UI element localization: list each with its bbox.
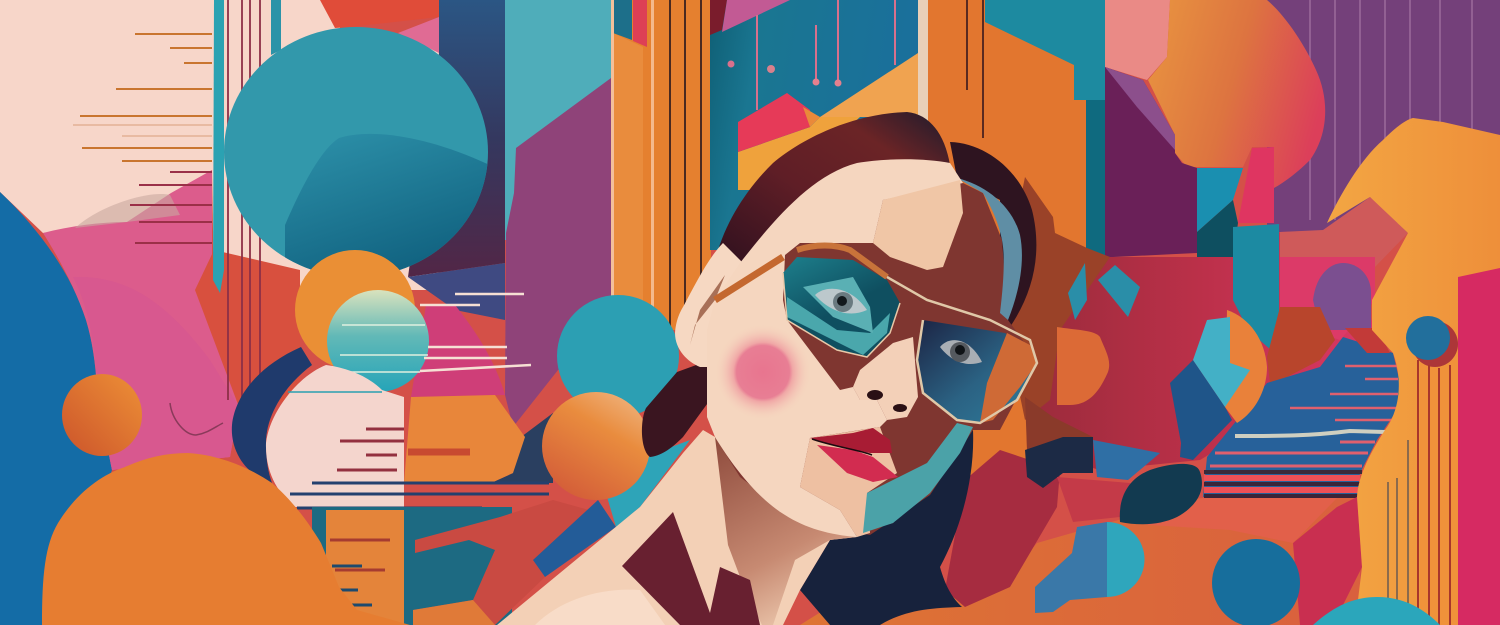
shape: salmon ground patch	[1130, 498, 1337, 543]
decoration: dashes over pale sphere	[288, 392, 549, 508]
glasses: right lens orange reflection	[980, 333, 1037, 423]
shape: blue brush block	[1093, 440, 1160, 480]
shape: rust blob	[1267, 307, 1335, 383]
hair: right strand	[950, 142, 1036, 327]
face: forehead peach shade	[873, 180, 963, 270]
face: chin peach shade	[800, 427, 897, 537]
panel: purple column	[505, 78, 611, 427]
shape: pale pink half sphere	[266, 365, 404, 507]
panel: teal column	[505, 0, 611, 240]
shape: hair shadow behind head	[1000, 177, 1110, 420]
decoration: white dashes	[420, 294, 531, 371]
ear: inner shade	[690, 275, 725, 345]
decoration: grey drips right	[1388, 440, 1408, 625]
icon: small orange sphere left	[62, 374, 142, 456]
icon: teal half circle with brushed blue	[1035, 522, 1144, 613]
face: teal jaw strip	[863, 423, 973, 533]
panel: teal top right block	[985, 0, 1105, 260]
shape: yellow orange mass right	[1327, 118, 1500, 625]
shape: orange brush block	[404, 395, 525, 483]
cheek: blush	[715, 324, 811, 420]
face: blue-grey side band	[957, 178, 1022, 320]
glasses: right lens	[917, 320, 1037, 423]
panel: large orange block	[928, 0, 1086, 480]
shape: mid blue brush patch	[1170, 360, 1232, 460]
shape: pink haze block	[1105, 0, 1170, 80]
shape: navy crescent	[232, 347, 312, 483]
shape: grey mist	[75, 194, 180, 228]
shape: lower maroon mass	[945, 450, 1060, 607]
icon: orange sphere centre left	[295, 250, 415, 370]
shape: dark patch between spheres	[491, 413, 553, 483]
decoration: drips on orange block	[967, 0, 983, 138]
decoration: thin vertical bars	[213, 0, 281, 400]
shape: rust curve above stripes	[1345, 328, 1390, 353]
shape: orange crescent	[1225, 310, 1267, 423]
glasses: frame	[715, 246, 1037, 423]
shape: pink half disc	[411, 305, 505, 397]
shape: left pink hills	[43, 170, 300, 470]
shape: dark teal strip	[1086, 100, 1105, 258]
panel: dark teal arch	[710, 0, 920, 250]
hair: lower dark navy	[800, 430, 973, 625]
shape: red patch	[1057, 477, 1137, 522]
shape: orange stripe band	[1420, 360, 1458, 625]
nose: light bridge	[853, 337, 918, 420]
panel: purple striped background	[1267, 0, 1500, 232]
shape: blue diagonal brush	[533, 500, 616, 577]
shape: dark navy blob	[1025, 437, 1093, 488]
glasses: left lens	[783, 257, 900, 357]
eye: left	[803, 277, 873, 333]
shape: light teal brush patch	[1193, 317, 1250, 407]
icon: orange ball centre	[542, 392, 650, 500]
panel: navy column	[408, 0, 505, 277]
icon: large orange sphere lower left	[42, 453, 410, 625]
panel: lower collage block	[312, 500, 589, 625]
nose: nostrils	[867, 390, 907, 412]
shape: teal lower disc	[605, 440, 690, 527]
shape: orange red blob	[1148, 0, 1325, 188]
face: dark skin shadow	[715, 163, 1037, 535]
shape: crimson band	[1280, 257, 1375, 340]
torso: neck under-jaw shade	[715, 437, 857, 625]
icon: blue sphere lower right	[1212, 539, 1300, 625]
shape: dark wedge below glasses	[1025, 397, 1093, 450]
decoration: pale strip beside arch	[918, 0, 928, 125]
torso: dark chest wedge	[622, 512, 760, 625]
shape: teal and dark teal blocks	[1197, 168, 1243, 257]
glasses: left lens light reflection	[787, 297, 890, 355]
icon: large teal sphere	[224, 27, 488, 270]
decoration: horizontal dashes upper left	[73, 34, 212, 243]
figure: woman portrait	[497, 112, 1037, 625]
shape: orange paint patch	[1057, 327, 1109, 405]
shape: teal block with point	[1233, 224, 1279, 357]
lips: red mouth	[810, 428, 898, 482]
shape: left blue arc	[0, 192, 112, 625]
shape: pink top strip	[398, 17, 439, 53]
eye: right	[940, 340, 982, 364]
icon: blue circle right with crescent	[1406, 316, 1458, 367]
panel: indigo foot of column	[408, 263, 505, 320]
hair: top dark maroon	[714, 112, 950, 275]
decoration: pink swirl	[170, 403, 223, 435]
shape: lower right crimson ground	[1293, 497, 1362, 625]
hair: back bob left	[642, 360, 710, 457]
torso: pale shoulder highlight	[535, 590, 665, 625]
panel: blue stripes right	[1203, 337, 1400, 497]
decoration: red drips right	[1418, 360, 1450, 625]
ear: left	[675, 243, 745, 367]
shape: crimson pillar	[1238, 147, 1274, 223]
shape: magenta paint mass right	[1025, 230, 1375, 470]
shape: lower floor	[800, 498, 1362, 625]
shape: purple arch	[1313, 263, 1371, 330]
shape: crimson right column	[1458, 268, 1500, 625]
shape: red-orange top wedge	[320, 0, 477, 28]
shape: salmon notch	[1280, 197, 1408, 267]
shape: dark teal oval	[1120, 464, 1202, 524]
icon: teal half circle bottom	[1313, 597, 1440, 625]
shape: small teal shards	[1068, 263, 1140, 320]
panel: pale pink sky upper left	[0, 0, 440, 290]
torso: shoulder and neck	[497, 430, 857, 625]
panel: dark purple block	[1105, 67, 1197, 257]
icon: small teal sphere with stripes	[327, 290, 429, 392]
panel: orange dripping stripes	[611, 0, 711, 330]
icon: teal circle centre	[557, 295, 679, 417]
face: light skin	[707, 159, 963, 537]
